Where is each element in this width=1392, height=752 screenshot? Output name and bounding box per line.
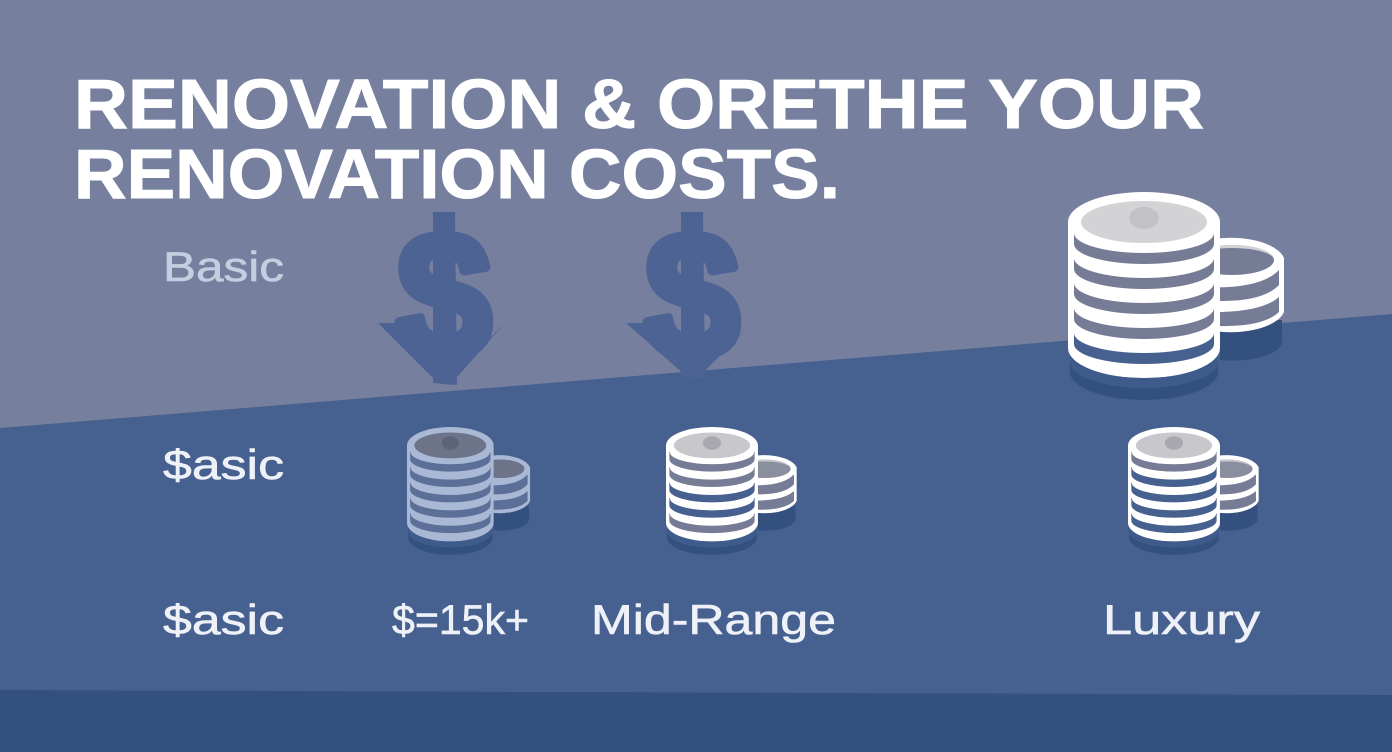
title	[74, 65, 1204, 213]
icon: coin stack, mid-range	[666, 427, 797, 555]
icon: large coin stack	[1068, 192, 1284, 400]
label: Mid-Range: Mid-Range	[591, 596, 836, 643]
title: RENOVATION & ORETHE YOUR	[74, 65, 1204, 143]
label: $asic row 3: $asic	[163, 596, 284, 643]
label: price: $=15k+	[392, 596, 529, 643]
footer band	[0, 690, 1392, 752]
icon: coin stack, basic	[407, 427, 530, 555]
label: Basic row 1: Basic	[163, 243, 284, 290]
icon: coin stack, luxury	[1128, 427, 1259, 555]
label: $asic row 2: $asic	[163, 441, 284, 488]
background: lower blue diagonal panel	[0, 314, 1392, 752]
title: RENOVATION COSTS.	[74, 135, 840, 213]
icon: dollar arrow two: $	[645, 196, 739, 397]
icon: dollar arrow one: $	[397, 196, 491, 397]
label: Luxury: Luxury	[1103, 596, 1260, 643]
